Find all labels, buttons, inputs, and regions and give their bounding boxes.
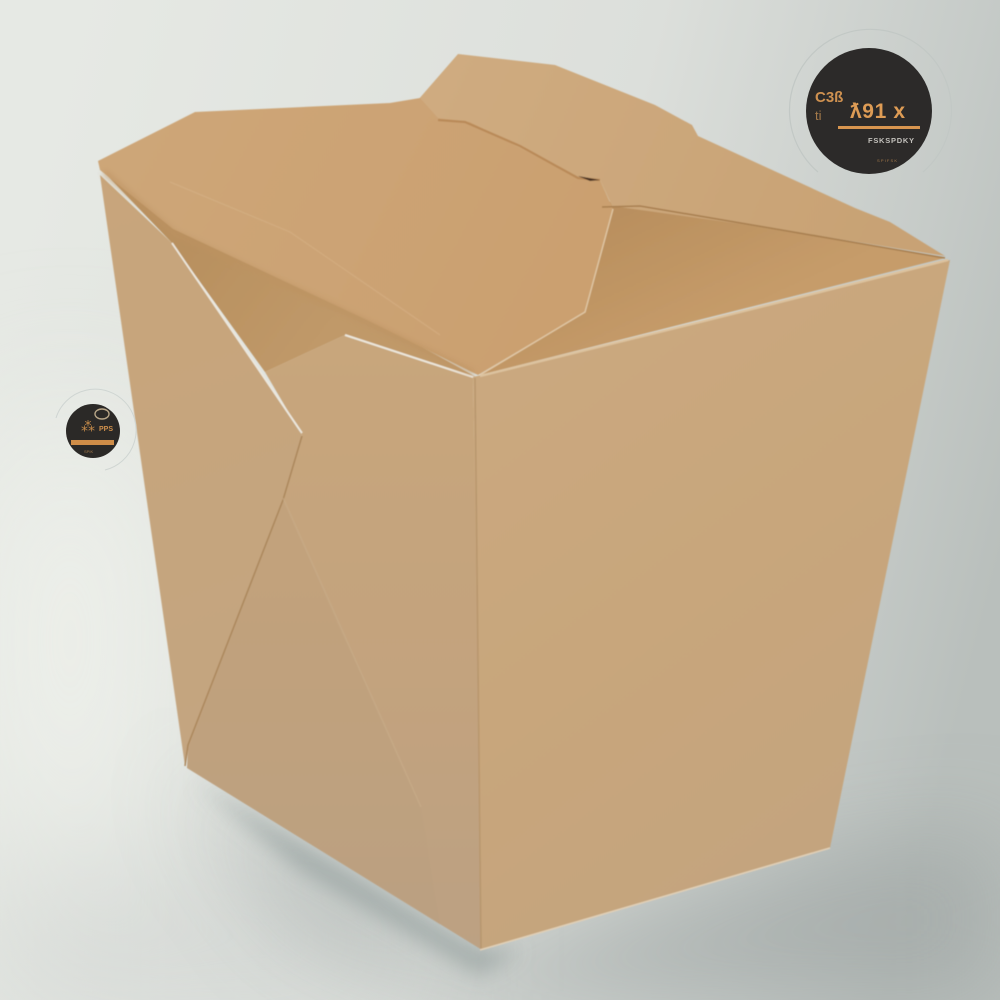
small badge leaf icon xyxy=(95,409,109,419)
contact shadow xyxy=(195,780,520,975)
small badge footnote: SPIK xyxy=(84,449,93,454)
badge text: main value: ƛ91 x xyxy=(850,100,905,123)
flap fold crease xyxy=(283,498,421,807)
lid right edge highlight xyxy=(480,209,613,375)
small badge disc xyxy=(66,404,120,458)
front fold shading xyxy=(187,498,440,925)
box right face xyxy=(473,260,950,950)
small badge bar xyxy=(71,440,114,445)
kraft paper box xyxy=(98,54,950,950)
vertical corner xyxy=(475,378,481,948)
back lid flap xyxy=(418,54,945,256)
badge text: footnote: SPIFSK xyxy=(877,158,897,163)
lid slot xyxy=(438,120,600,180)
inner lid recess xyxy=(480,200,945,375)
lid lower edge band xyxy=(104,172,474,373)
badge: left xyxy=(56,389,136,470)
small badge text: PPS xyxy=(99,426,113,433)
small badge wheat icon: ⁂ xyxy=(81,418,95,434)
badge text: small code: C3ß xyxy=(815,89,843,106)
front lid flap xyxy=(98,98,613,375)
background glow xyxy=(0,400,400,1000)
box shadow xyxy=(185,775,1000,1000)
small badge ring xyxy=(56,389,136,470)
badge rule xyxy=(838,126,920,129)
right face top edge xyxy=(480,260,948,376)
badge ring xyxy=(790,29,952,172)
box base edge right xyxy=(480,848,830,950)
flap lower edge shadow xyxy=(185,436,302,766)
badge disc xyxy=(806,48,932,174)
back lid lower edge xyxy=(602,206,945,258)
lid slot shadow xyxy=(578,176,600,181)
left tuck flap xyxy=(100,175,302,766)
flap white paper edge xyxy=(172,243,302,433)
box front-left face xyxy=(187,335,482,950)
badge text: small line: ti xyxy=(815,108,822,123)
badge: top right xyxy=(790,29,952,174)
badge text: caption: FSKSPDKY xyxy=(868,136,914,145)
lid front crease xyxy=(170,182,440,335)
front panel top edge xyxy=(345,335,473,377)
inner pocket behind flap xyxy=(100,168,476,377)
